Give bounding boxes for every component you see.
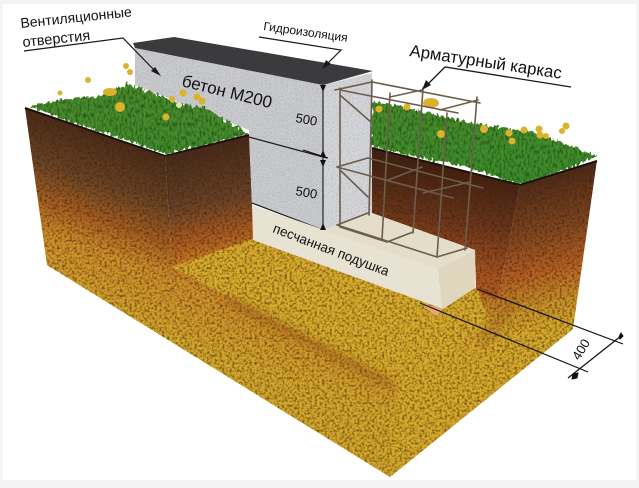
soil: lower sand base xyxy=(47,238,573,477)
rebar: diagonals xyxy=(340,95,372,197)
cushion front face xyxy=(252,205,443,309)
soil: right outer face xyxy=(390,160,597,477)
label: concrete grade: бетон М200 xyxy=(180,71,274,112)
sand cushion xyxy=(252,205,475,316)
waterproofing top layer xyxy=(133,37,373,85)
soil: brown streak on right wall xyxy=(480,300,515,345)
arrowhead xyxy=(322,60,331,69)
concrete side face xyxy=(323,73,372,230)
soil: front left face xyxy=(25,108,398,477)
label text: ventilation: Вентиляционные xyxy=(20,3,133,31)
label text: rebar cage: Арматурный каркас xyxy=(408,41,563,83)
dimension arrows xyxy=(320,85,326,230)
dimension line xyxy=(303,86,328,228)
leader arrow xyxy=(259,37,341,64)
soil: pit left wall xyxy=(165,135,255,267)
rebar: bottom ring xyxy=(337,213,467,257)
leader arrow xyxy=(24,38,156,72)
arrowhead xyxy=(422,80,431,90)
rebar cage xyxy=(335,80,483,257)
concrete wall xyxy=(133,37,373,230)
rebar: vertical posts xyxy=(340,80,477,257)
soil: brown streak along pit edge xyxy=(225,298,392,384)
black soil edge: right xyxy=(372,148,597,185)
dimension value: 400 xyxy=(569,336,593,363)
dimension: cushion width xyxy=(420,289,623,379)
dimension value: lower: 500 xyxy=(294,183,318,202)
label text: openings: отверстия xyxy=(22,28,91,51)
soil block xyxy=(25,108,597,477)
grass patch: right xyxy=(372,101,597,185)
arrowhead xyxy=(151,67,161,76)
seam lines xyxy=(249,137,327,230)
cushion orange shadow xyxy=(420,303,443,316)
label: ventilation openings xyxy=(20,3,161,76)
cushion end face xyxy=(438,250,475,309)
dimension ticks xyxy=(572,333,623,379)
black soil edge: left xyxy=(25,108,249,156)
soil: pit back wall behind rebar xyxy=(372,148,520,300)
rebar: middle ring xyxy=(337,158,483,198)
cushion top face xyxy=(323,213,475,269)
leader arrow xyxy=(428,67,571,87)
rebar: top ring xyxy=(335,82,480,113)
grass patch: left xyxy=(25,84,249,156)
dimension lines xyxy=(420,289,623,378)
dimension value: upper: 500 xyxy=(294,110,318,129)
flowers: left patch xyxy=(58,63,206,120)
label: waterproofing xyxy=(259,19,349,69)
flowers: right patch xyxy=(376,98,570,144)
label text: waterproofing: Гидроизоляция xyxy=(263,19,349,45)
label: sand cushion: песчанная подушка xyxy=(271,221,392,279)
concrete front face xyxy=(135,47,323,230)
soil: pit floor sand xyxy=(172,238,490,385)
dimension: wall height xyxy=(294,85,328,230)
label: rebar cage xyxy=(408,41,571,90)
